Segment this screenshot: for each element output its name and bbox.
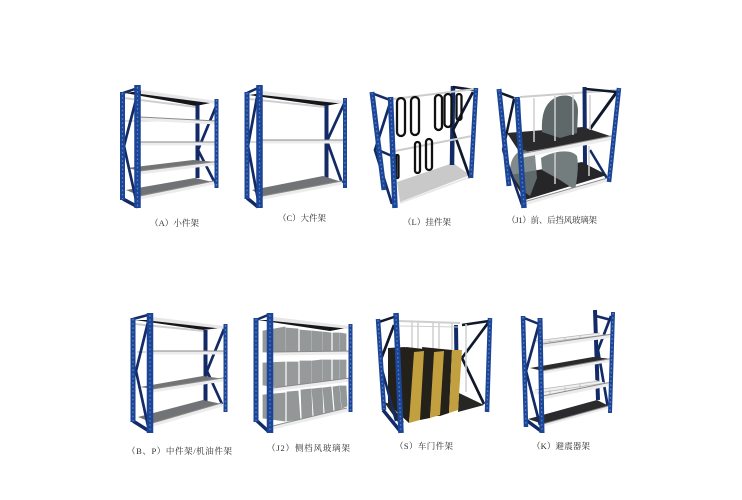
rack: (S) door parts shelf [378,313,490,433]
rack: (L) hanging parts shelf [372,86,476,208]
rack: (B, P) medium parts / engine oil shelf [133,313,226,433]
windshield panels row 3 [263,386,347,421]
windshield panels row 2 [263,360,346,388]
label: (K): （K）避震器架 [532,441,590,451]
rack: (K) shock absorber shelf [523,310,613,433]
rack: (C) large parts shelf [247,85,345,208]
wire shelf lower [530,380,612,398]
wire shelf upper [530,333,613,346]
label: (L): （L）挂件架 [403,217,451,227]
label: (J1): （J1）前、后挡风玻璃架 [507,215,597,225]
hanging loops [396,94,462,178]
windshield panels row 1 [263,327,346,352]
label: (C): （C）大件架 [278,213,326,223]
label: (B, P): （B、P）中件架/机油件架 [127,446,232,456]
label: (S): （S）车门件架 [395,441,453,451]
rack: (J1) front and rear windshield shelf [498,87,619,208]
label: (A): （A）小件架 [150,218,199,228]
label: (J2): （J2）侧档风玻璃架 [267,443,350,453]
rack: (J2) side windshield shelf [256,313,350,433]
rack: (A) small parts shelf [122,85,217,208]
door panels [388,347,462,423]
